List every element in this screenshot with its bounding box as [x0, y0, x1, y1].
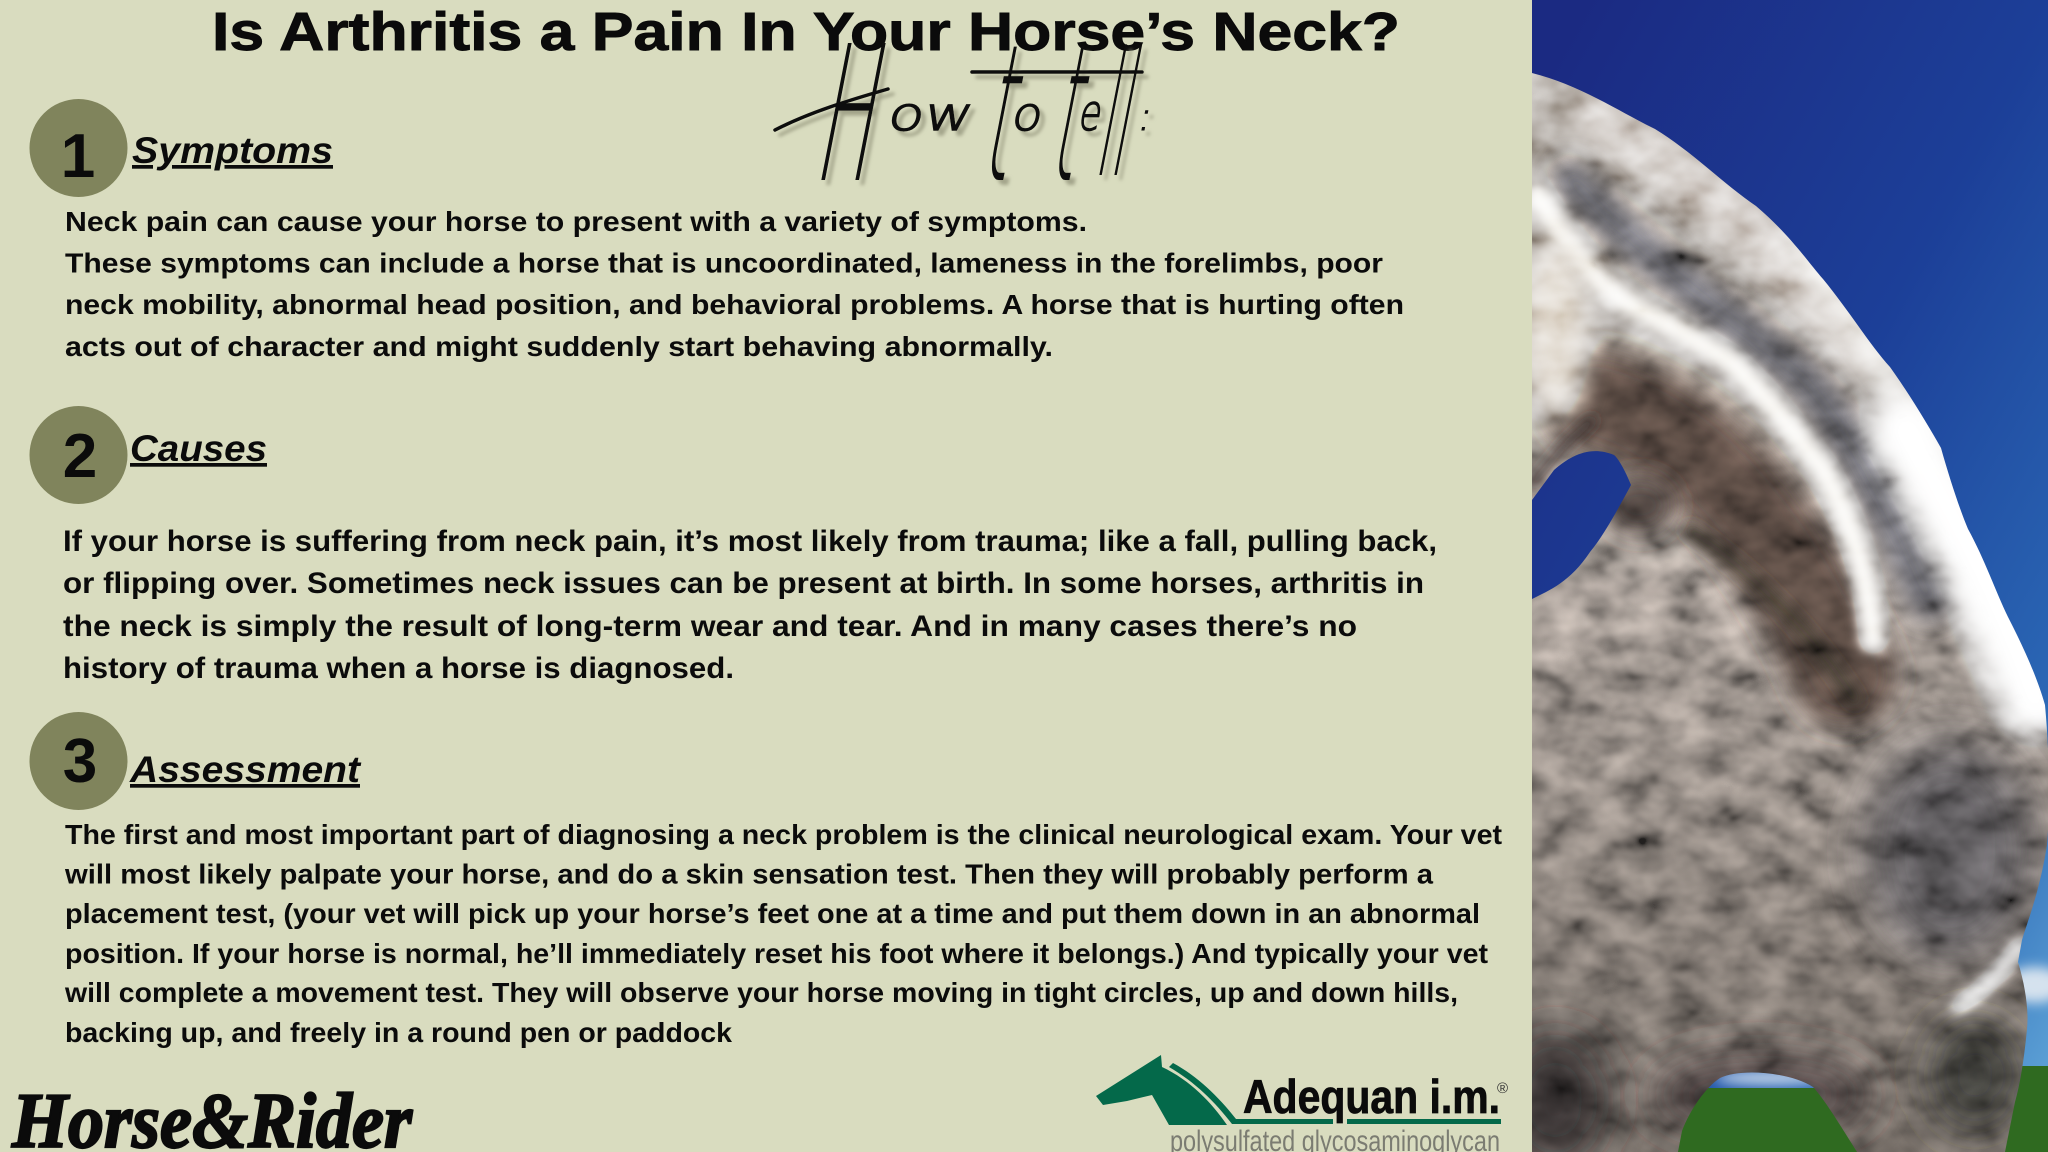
registered mark: ®: [1497, 1080, 1508, 1097]
causes text: or flipping over. Sometimes neck issues can be present at birth. In some horses, arthritis in: [63, 567, 1424, 600]
heading: assessment: Assessment: [129, 749, 362, 790]
logo: Adequan i.m.: [1096, 1055, 1508, 1152]
causes text: If your horse is suffering from neck pain, it’s most likely from trauma; like a fall, pulling back,: [63, 525, 1437, 558]
script subheading: How to tell: ll: [1085, 15, 1154, 216]
number badge 3: [30, 712, 128, 810]
script subheading: How to tell: :: [1134, 93, 1157, 140]
symptoms text: [65, 206, 1404, 362]
assessment text: will complete a movement test. They will observe your horse moving in tight circles, up and down hills,: [64, 977, 1458, 1008]
decorative swashes of the script lettering: [775, 72, 1142, 130]
number badge 1: [30, 99, 128, 197]
causes text: history of trauma when a horse is diagnosed.: [63, 652, 734, 685]
script subheading: How to tell: ow: [884, 87, 978, 141]
icon: green horse head: [1096, 1055, 1501, 1125]
heading: symptoms: Symptoms: [132, 130, 333, 171]
script subheading: How to tell: H: [804, 6, 902, 225]
number badge 1: 1: [61, 122, 95, 191]
causes text: [63, 525, 1437, 685]
background panel: [0, 0, 1532, 1152]
section 2: causes: [30, 406, 1437, 685]
script subheading: How to tell: t: [1039, 5, 1106, 226]
causes text: the neck is simply the result of long-term wear and tear. And in many cases there’s no: [63, 610, 1357, 643]
symptoms text: acts out of character and might suddenly start behaving abnormally.: [65, 331, 1053, 362]
assessment text: The first and most important part of diagnosing a neck problem is the clinical neurological exam. Your vet: [65, 819, 1502, 850]
symptoms text: Neck pain can cause your horse to present with a variety of symptoms.: [65, 206, 1087, 237]
assessment text: placement test, (your vet will pick up your horse’s feet one at a time and put them down in an abnormal: [65, 898, 1480, 929]
assessment text: backing up, and freely in a round pen or paddock: [65, 1017, 732, 1048]
script subheading: How to tell: e: [1075, 83, 1108, 142]
number badge 2: 2: [63, 422, 97, 491]
script subheading: How to tell: o: [1008, 87, 1048, 141]
assessment text: position. If your horse is normal, he’ll immediately reset his foot where it belongs.) And typically your vet: [65, 938, 1488, 969]
section 3: assessment: [30, 712, 1502, 1048]
section 1: symptoms: [30, 99, 1404, 362]
title: Is Arthritis a Pain In Your Horse’s Neck?: [212, 2, 1400, 62]
symptoms text: These symptoms can include a horse that is uncoordinated, lameness in the forelimbs, poor: [65, 248, 1383, 278]
number badge 2: [30, 406, 128, 504]
photo: grey horse neck against blue sky: [1500, 0, 2048, 1152]
script subheading: How to tell: [775, 5, 1174, 226]
number badge 3: 3: [63, 727, 97, 796]
script subheading: How to tell: t: [971, 5, 1040, 226]
heading: causes: Causes: [130, 428, 267, 469]
assessment text: will most likely palpate your horse, and do a skin sensation test. Then they will probably perform a: [64, 858, 1433, 890]
wordmark: Adequan i.m.: [1243, 1070, 1500, 1123]
symptoms text: neck mobility, abnormal head position, and behavioral problems. A horse that is hurting often: [65, 289, 1404, 320]
assessment text: [64, 819, 1502, 1048]
